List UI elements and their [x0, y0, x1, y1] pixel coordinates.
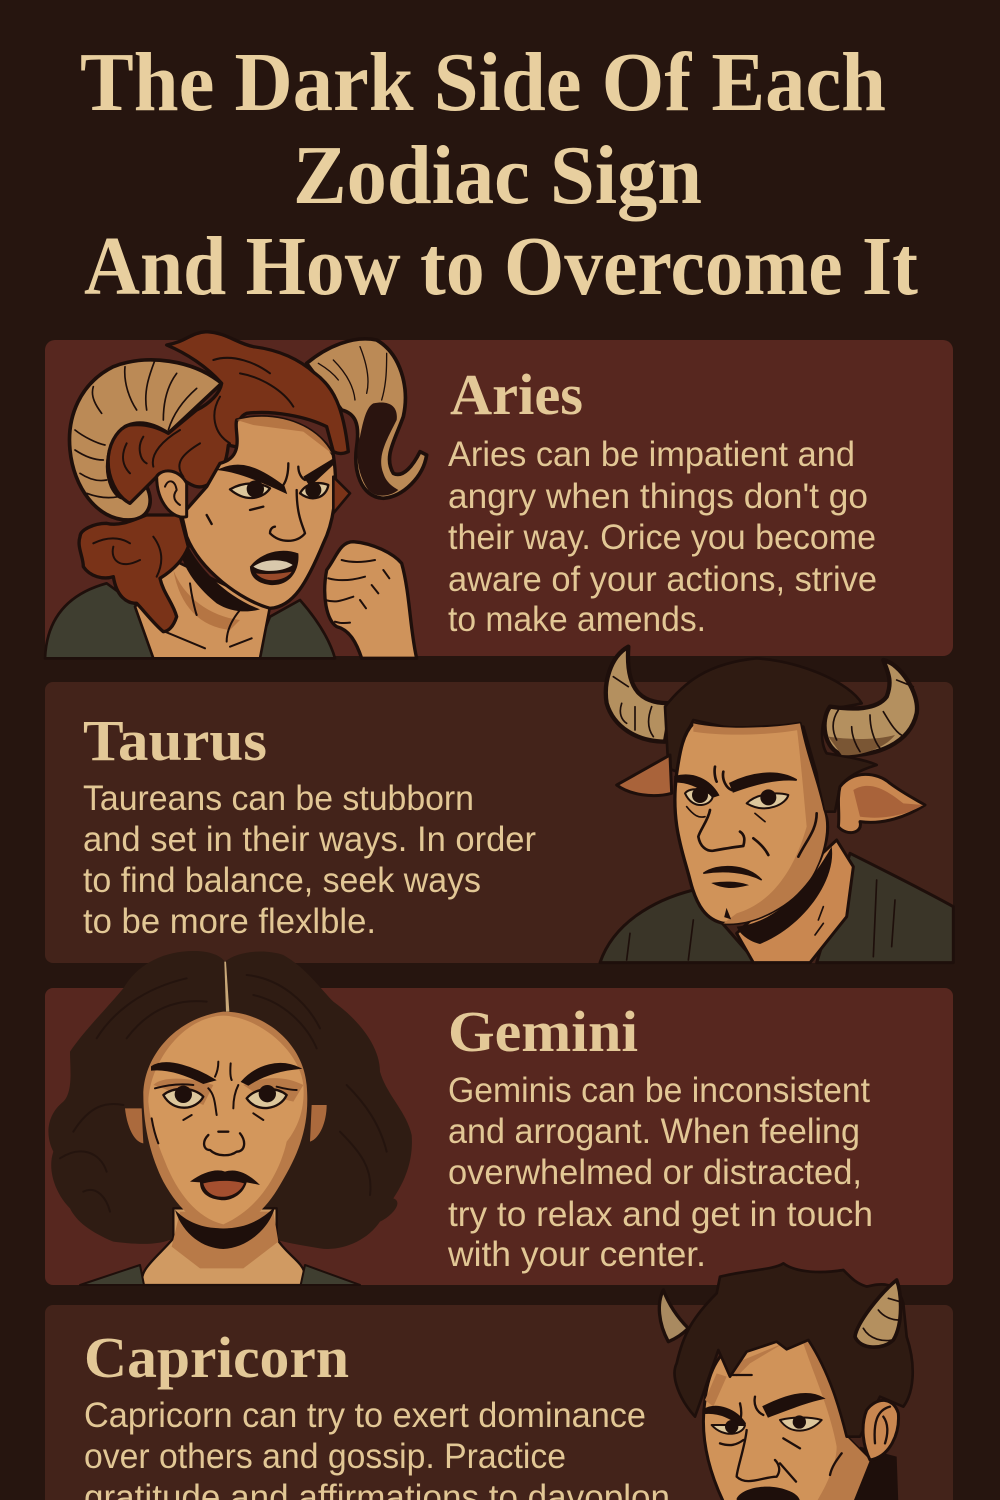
Gemini description: overwhelmed or distracted,	[448, 1153, 862, 1192]
Aries description: aware of your actions, strive	[448, 560, 877, 599]
panel: Taurus	[45, 682, 953, 963]
face	[143, 1012, 307, 1228]
ears	[125, 1105, 327, 1143]
Gemini description: with your center.	[447, 1235, 706, 1274]
title	[80, 36, 918, 313]
Aries description: Aries can be impatient and	[448, 435, 855, 474]
shirt	[45, 583, 335, 658]
title: The Dark Side Of Each	[80, 36, 886, 129]
Aries heading: Aries	[450, 362, 583, 427]
face	[703, 1333, 870, 1500]
illustration: Gemini woman with dark wavy hair	[48, 951, 412, 1285]
title: And How to Overcome It	[84, 220, 918, 313]
right bull horn	[825, 660, 917, 755]
Aries description: to make amends.	[448, 600, 706, 639]
left horn	[659, 1290, 688, 1342]
Taurus description: Taureans can be stubborn	[83, 779, 474, 818]
nose and moustache	[720, 1375, 842, 1482]
mouth	[190, 1170, 260, 1200]
Gemini description: Geminis can be inconsistent	[448, 1071, 870, 1110]
hair parting	[224, 962, 229, 1012]
panel: Aries	[45, 340, 953, 656]
Taurus heading: Taurus	[83, 708, 267, 773]
nose	[204, 1132, 244, 1155]
neck shadow	[847, 1447, 898, 1500]
face	[182, 417, 335, 608]
Aries description: angry when things don't go	[448, 477, 868, 516]
Gemini description: and arrogant. When feeling	[448, 1112, 860, 1151]
panel: Capricorn	[45, 1305, 953, 1500]
Capricorn description	[84, 1396, 670, 1500]
ear	[157, 471, 187, 517]
title: Zodiac Sign	[293, 129, 702, 222]
Aries description: their way. Orice you become	[448, 518, 876, 557]
ears	[617, 755, 672, 796]
illustration: Taurus man with bull horns	[600, 647, 953, 963]
Capricorn description: over others and gossip. Practice	[84, 1437, 566, 1476]
right ram horn	[307, 339, 427, 498]
eyes and brows	[703, 1394, 823, 1427]
right horn	[855, 1280, 901, 1347]
eyes and brows	[222, 466, 285, 492]
Gemini description	[447, 1071, 873, 1274]
Capricorn heading: Capricorn	[84, 1325, 349, 1390]
Taurus description: to be more flexlble.	[83, 902, 376, 941]
shirt	[80, 1265, 360, 1285]
hair	[108, 332, 348, 503]
panel: Gemini	[45, 988, 953, 1285]
Gemini heading: Gemini	[448, 999, 638, 1064]
eyes and brows	[675, 773, 797, 797]
illustration: Capricorn man with small horns	[659, 1263, 913, 1500]
eyes and brows	[152, 1063, 300, 1085]
shirt	[600, 853, 953, 963]
mouth	[250, 551, 299, 585]
Gemini description: try to relax and get in touch	[448, 1195, 873, 1234]
hair	[48, 951, 412, 1249]
hair	[675, 1263, 913, 1437]
ear	[863, 1400, 899, 1460]
left bull horn	[606, 647, 672, 742]
left ram horn	[70, 360, 222, 520]
Aries description	[448, 435, 877, 639]
Taurus description: to find balance, seek ways	[83, 861, 481, 900]
illustration: Aries woman with ram horns	[45, 332, 427, 658]
Taurus description: and set in their ways. In order	[83, 820, 536, 859]
Capricorn description: Capricorn can try to exert dominance	[84, 1396, 646, 1435]
face	[675, 723, 828, 924]
Taurus description	[83, 779, 536, 941]
fist	[325, 542, 417, 658]
hair	[665, 658, 877, 812]
nose and mouth lines	[698, 767, 817, 857]
neck and chest	[142, 1208, 305, 1285]
